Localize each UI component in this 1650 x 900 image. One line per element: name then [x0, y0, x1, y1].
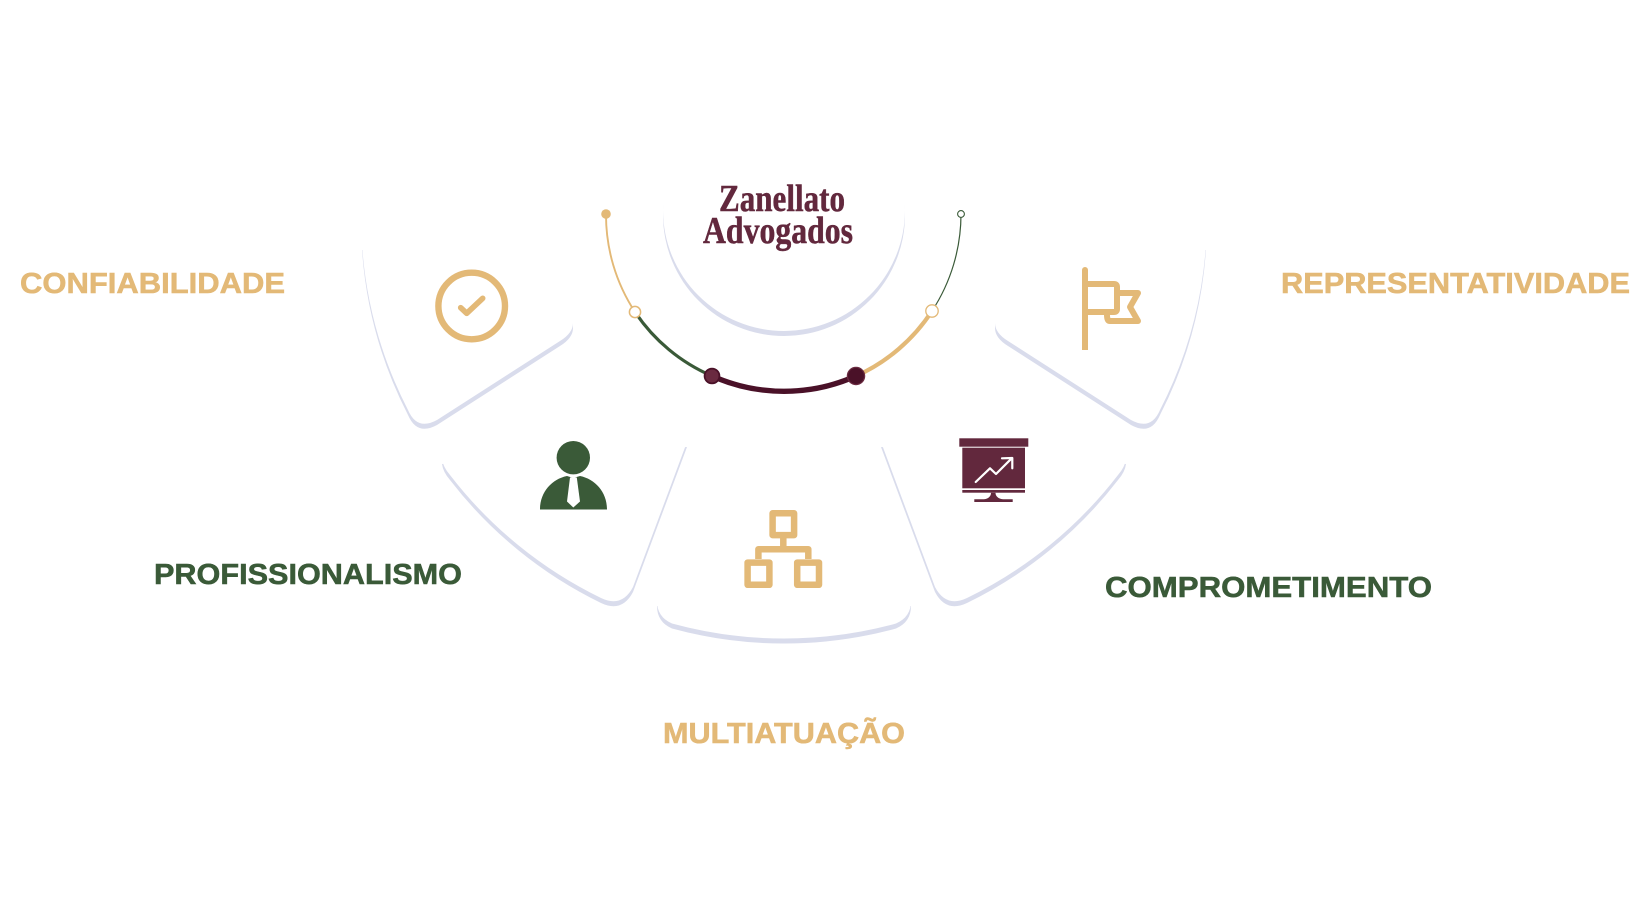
panel: central semicircle: [663, 89, 905, 336]
arc timeline with nodes: [601, 209, 964, 391]
logo: Zanellato Advogados: Zanellato: [719, 178, 845, 220]
panel: comprometimento: [881, 442, 1126, 606]
label: representatividade: REPRESENTATIVIDADE: [1281, 268, 1630, 300]
icon: person with tie: [540, 441, 607, 510]
label: comprometimento: COMPROMETIMENTO: [1105, 572, 1432, 604]
label: multiatuação: MULTIATUAÇÃO: [663, 718, 905, 750]
icon: check circle: [438, 273, 505, 339]
panel: profissionalismo: [442, 442, 687, 606]
panel: multiatuação: [657, 601, 911, 644]
logo: Zanellato Advogados: [703, 178, 853, 252]
panel: representatividade: [995, 245, 1206, 429]
icon: flag: [1082, 270, 1138, 350]
icon: presentation chart: [959, 438, 1028, 502]
label: confiabilidade: CONFIABILIDADE: [20, 268, 285, 300]
logo: Zanellato Advogados: Advogados: [703, 210, 853, 252]
panel: confiabilidade: [362, 245, 573, 429]
label: profissionalismo: PROFISSIONALISMO: [154, 559, 462, 591]
icon: network hierarchy: [748, 513, 819, 585]
